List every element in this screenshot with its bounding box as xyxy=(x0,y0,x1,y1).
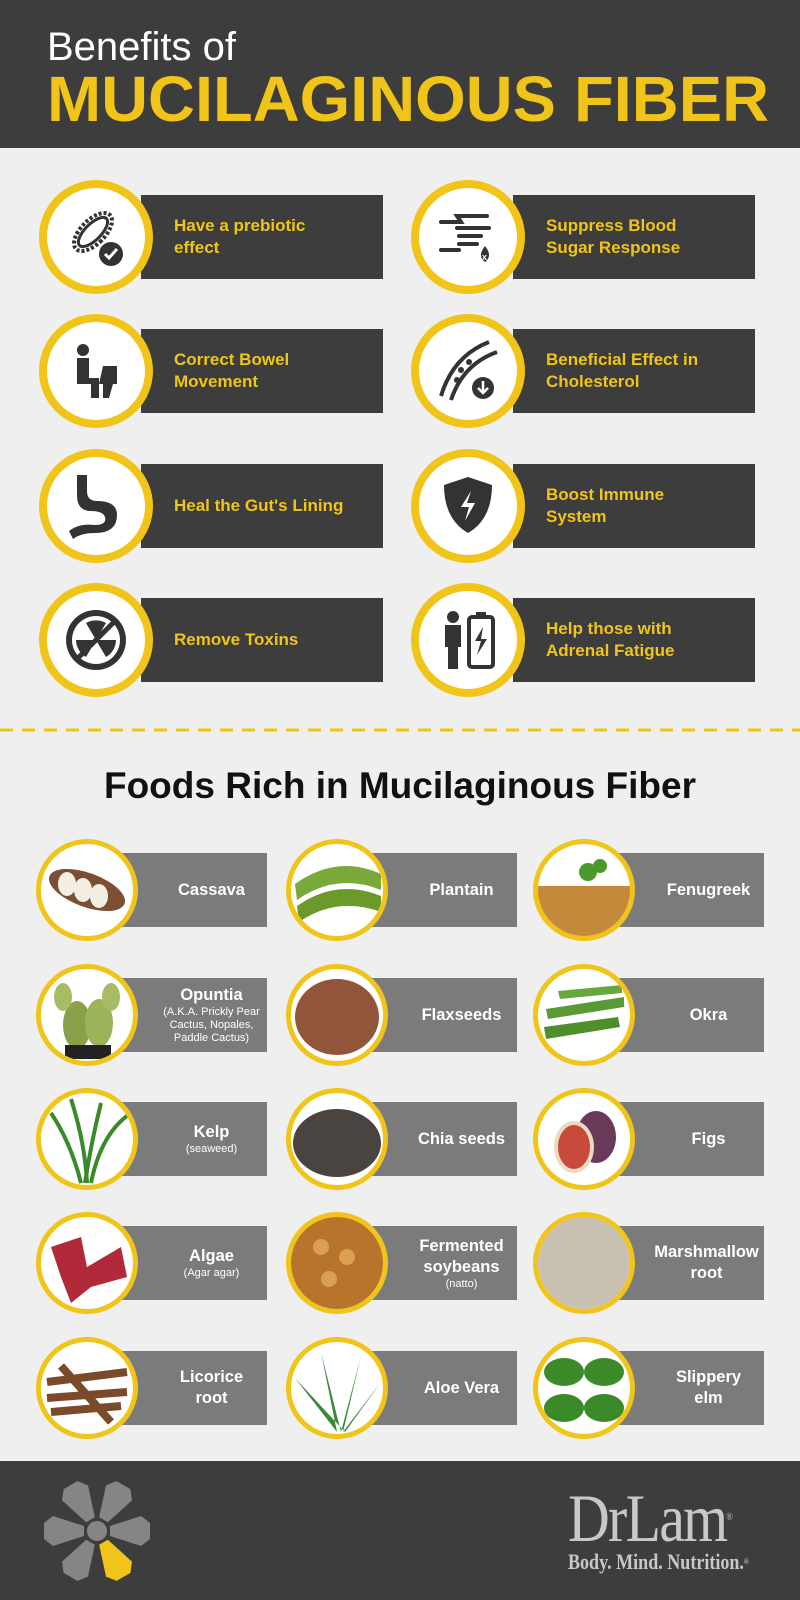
food: marshmallow root xyxy=(533,1212,764,1314)
food: soybeans: Fermented xyxy=(419,1236,504,1254)
food: fenugreek: Fenugreek xyxy=(667,880,750,898)
food: licorice root: Licorice xyxy=(180,1368,243,1386)
title: MUCILAGINOUS FIBER xyxy=(47,63,769,135)
food: chia seeds xyxy=(286,1088,517,1190)
food: plantain xyxy=(286,839,517,941)
food: soybeans xyxy=(286,1212,517,1314)
food: slippery elm: Slippery xyxy=(676,1368,741,1386)
food: chia seeds: Chia seeds xyxy=(418,1130,505,1148)
food: aloe vera xyxy=(286,1337,517,1439)
benefit: bowel: Movement xyxy=(174,372,258,391)
benefit: prebiotic: Have a prebiotic xyxy=(174,216,305,235)
footer xyxy=(0,1461,800,1600)
food: marshmallow root: Marshmallow xyxy=(654,1243,759,1261)
food: licorice root xyxy=(36,1337,267,1439)
header xyxy=(0,0,800,148)
food: figs xyxy=(533,1088,764,1190)
food: slippery elm: elm xyxy=(694,1389,723,1407)
food: okra: Okra xyxy=(690,1006,727,1024)
icon: shield xyxy=(411,449,525,563)
food: okra xyxy=(533,964,764,1066)
benefit: toxins: Remove Toxins xyxy=(174,630,298,649)
food: figs: Figs xyxy=(692,1130,725,1148)
food: cassava xyxy=(36,839,267,941)
benefit: adrenal: Help those with xyxy=(546,619,672,638)
logo: Dr Lam: DrLam® xyxy=(568,1480,731,1556)
panel: benefits xyxy=(39,180,755,697)
food: licorice root: root xyxy=(195,1389,228,1407)
food: kelp: (seaweed) xyxy=(186,1143,237,1155)
benefit: cholesterol: Beneficial Effect in xyxy=(546,350,698,369)
food: algae: Algae xyxy=(189,1247,234,1265)
benefit: bowel xyxy=(39,314,383,428)
heading: foods: Foods Rich in Mucilaginous Fiber xyxy=(104,765,696,806)
food: soybeans: soybeans xyxy=(423,1258,500,1276)
icon: person battery xyxy=(411,583,525,697)
icon: artery xyxy=(411,314,525,428)
food: kelp: Kelp xyxy=(194,1123,229,1141)
benefit: immune xyxy=(411,449,755,563)
food: kelp xyxy=(36,1088,267,1190)
logo: flower xyxy=(44,1481,150,1581)
benefit: adrenal xyxy=(411,583,755,697)
benefit: blood sugar xyxy=(411,180,755,294)
food: opuntia: Opuntia xyxy=(180,986,243,1004)
benefit: prebiotic: effect xyxy=(174,238,219,257)
food: marshmallow root: root xyxy=(690,1264,723,1282)
food: algae: (Agar agar) xyxy=(184,1267,239,1279)
icon: no radiation xyxy=(39,583,153,697)
benefit: blood sugar: Sugar Response xyxy=(546,238,680,257)
icon: finger drop xyxy=(411,180,525,294)
food: fenugreek xyxy=(533,839,764,941)
food: plantain: Plantain xyxy=(429,880,494,898)
title: Benefits of xyxy=(47,25,237,69)
food: opuntia: (A.K.A. Prickly Pear Cactus, Nopales, Paddle Cactus) xyxy=(163,1006,260,1044)
benefit: gut xyxy=(39,449,383,563)
benefit: toxins xyxy=(39,583,383,697)
icon: stomach xyxy=(39,449,153,563)
panel: foods xyxy=(36,839,764,1439)
benefit: immune: Boost Immune xyxy=(546,485,664,504)
benefit: blood sugar: Suppress Blood xyxy=(546,216,676,235)
benefit: gut: Heal the Gut's Lining xyxy=(174,496,343,515)
benefit: cholesterol xyxy=(411,314,755,428)
benefit: adrenal: Adrenal Fatigue xyxy=(546,641,674,660)
food: opuntia xyxy=(36,964,267,1066)
food: slippery elm xyxy=(533,1337,764,1439)
title xyxy=(47,25,769,135)
food: cassava: Cassava xyxy=(178,880,245,898)
benefit: bowel: Correct Bowel xyxy=(174,350,289,369)
food: algae xyxy=(36,1212,267,1314)
food: flaxseeds: Flaxseeds xyxy=(422,1006,501,1024)
food: soybeans: (natto) xyxy=(446,1278,477,1290)
logo: Dr Lam: Body. Mind. Nutrition.® xyxy=(568,1549,749,1574)
benefit: immune: System xyxy=(546,507,606,526)
food: flaxseeds xyxy=(286,964,517,1066)
benefit: cholesterol: Cholesterol xyxy=(546,372,640,391)
food: aloe vera: Aloe Vera xyxy=(424,1378,499,1396)
icon: bacteria xyxy=(39,180,153,294)
benefit: prebiotic xyxy=(39,180,383,294)
icon: toilet xyxy=(39,314,153,428)
icon: finger drop: x xyxy=(482,252,487,262)
